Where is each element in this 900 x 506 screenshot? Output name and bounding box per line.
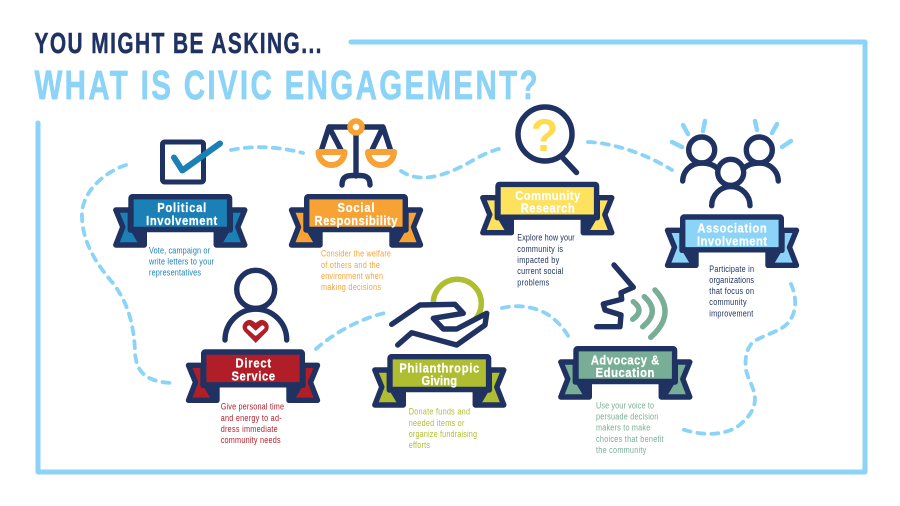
- panel: association involvement: organizations: [709, 274, 754, 285]
- panel: philanthropic giving: Philanthropic: [399, 361, 480, 376]
- panel: political involvement: Political: [157, 200, 206, 215]
- panel: community research: current social: [517, 265, 563, 276]
- icon: hand with coin: [392, 279, 487, 345]
- panel: direct service: Direct: [235, 356, 271, 371]
- panel: philanthropic giving: Giving: [421, 373, 457, 388]
- panel: advocacy and education: [561, 349, 690, 455]
- panel: association involvement: [668, 217, 796, 319]
- panel: philanthropic giving: efforts: [409, 439, 430, 450]
- panel: direct service: dress immediate: [221, 423, 278, 434]
- panel: advocacy and education: Use your voice to: [596, 399, 654, 411]
- panel: advocacy and education: the community: [596, 444, 647, 455]
- icon: person with heart: [225, 270, 287, 343]
- panel: advocacy and education: Advocacy &: [591, 353, 659, 368]
- panel: social responsibility: Consider the welfare: [321, 248, 391, 259]
- title: WHAT IS CIVIC ENGAGEMENT?: [34, 62, 537, 108]
- panel: community research: Research: [521, 201, 575, 216]
- title: YOU MIGHT BE ASKING...: [34, 28, 321, 60]
- panel: association involvement: that focus on: [709, 285, 754, 296]
- panel: social responsibility: Social: [338, 200, 374, 215]
- panel: association involvement: Involvement: [697, 234, 767, 249]
- panel: community research: impacted by: [517, 254, 560, 265]
- panel: political involvement: [116, 197, 245, 278]
- icon: speaking head: [597, 265, 665, 337]
- panel: social responsibility: of others and the: [321, 259, 380, 270]
- icon: group of people: [672, 121, 791, 206]
- panel: philanthropic giving: [375, 357, 504, 450]
- panel: political involvement: representatives: [149, 267, 201, 278]
- panel: association involvement: Association: [697, 221, 767, 236]
- panel: direct service: Service: [231, 369, 275, 384]
- dashed connector path: [82, 142, 795, 434]
- panel: advocacy and education: makers to make: [596, 422, 651, 433]
- panel: association involvement: Participate in: [709, 263, 754, 274]
- panel: social responsibility: [292, 197, 420, 292]
- panel: political involvement: Involvement: [146, 213, 217, 228]
- panel: political involvement: Vote, campaign or: [149, 244, 210, 256]
- panel: community research: [483, 184, 612, 288]
- icon: balance scales: [318, 121, 394, 185]
- panel: philanthropic giving: Donate funds and: [409, 406, 470, 417]
- title: [34, 28, 537, 108]
- panel: philanthropic giving: needed items or: [409, 417, 465, 428]
- panel: community research: problems: [517, 277, 549, 288]
- panel: social responsibility: making decisions: [321, 281, 381, 292]
- panel: direct service: [188, 352, 318, 445]
- icon: checkbox: [162, 142, 220, 182]
- panel: association involvement: improvement: [709, 308, 754, 319]
- panel: social responsibility: environment when: [321, 270, 383, 281]
- panel: direct service: community needs: [221, 434, 281, 445]
- frame border: [38, 42, 865, 472]
- panel: advocacy and education: choices that benefit: [596, 433, 664, 444]
- icon: magnifying glass: [518, 107, 576, 172]
- panel: philanthropic giving: organize fundraising: [409, 428, 477, 439]
- panel: community research: community is: [517, 243, 563, 254]
- panel: political involvement: write letters to your: [148, 256, 214, 267]
- panel: advocacy and education: persuade decision: [596, 411, 659, 422]
- icon: magnifying glass: ?: [531, 110, 558, 161]
- panel: association involvement: community: [709, 296, 747, 307]
- panel: direct service: Give personal time: [221, 401, 284, 412]
- panel: direct service: and energy to ad-: [221, 412, 282, 423]
- panel: social responsibility: Responsibility: [315, 213, 398, 228]
- panel: community research: Explore how your: [517, 232, 575, 243]
- panel: community research: Community: [515, 188, 580, 203]
- panel: advocacy and education: Education: [596, 365, 654, 380]
